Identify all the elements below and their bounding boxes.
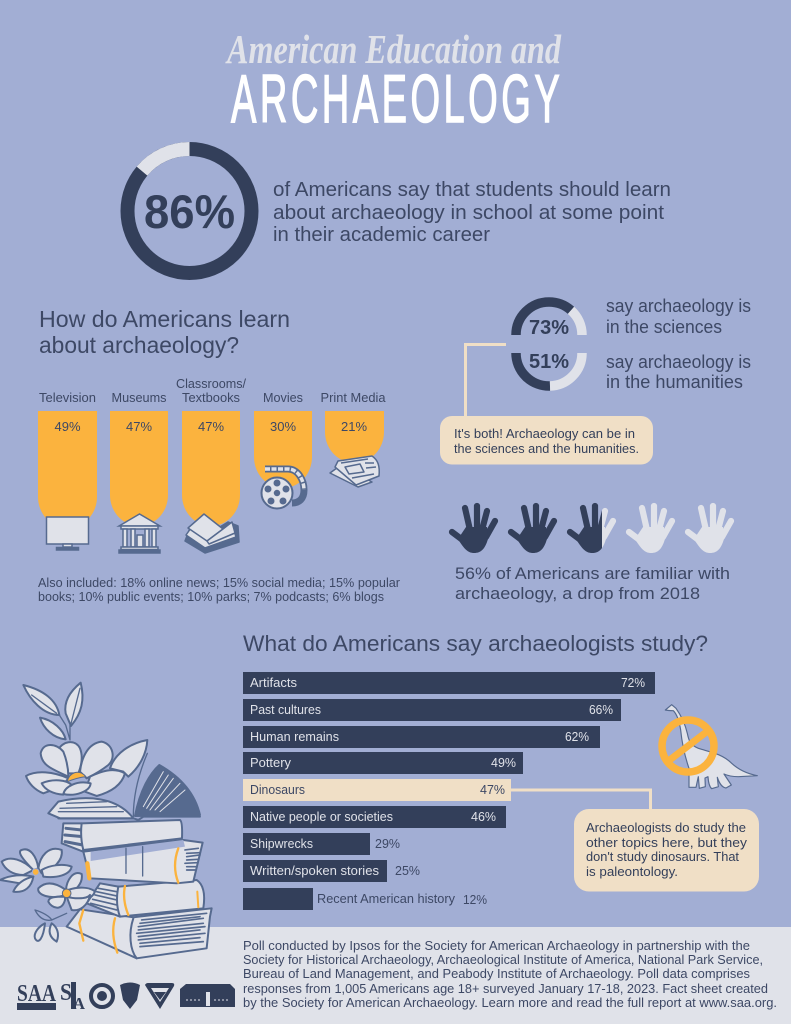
icon: television bbox=[46, 517, 88, 550]
bar: television: 49% bbox=[54, 419, 81, 434]
pictogram: hands 56% bbox=[452, 506, 731, 553]
bar: written stories bbox=[243, 860, 420, 882]
callout: it's both: the sciences and the humanities. bbox=[454, 442, 639, 456]
icon: dark hand 2 bbox=[511, 506, 554, 553]
footer text: Bureau of Land Management, and Peabody Institute of Archaeology. Poll data comprises bbox=[243, 967, 750, 981]
text: familiarity statement: archaeology, a drop from 2018 bbox=[455, 585, 700, 603]
text: sciences and humanities labels: in the humanities bbox=[606, 372, 743, 392]
icon: newspaper bbox=[330, 456, 379, 487]
bar: shipwrecks: 29% bbox=[375, 837, 400, 851]
callout: it's both bbox=[440, 416, 653, 464]
logo: SHA: A bbox=[73, 994, 86, 1013]
callout: paleontology: is paleontology. bbox=[586, 865, 678, 879]
heading: how Americans learn bbox=[39, 306, 290, 358]
leaves and stem bbox=[23, 683, 83, 740]
logo: SAA: SAA bbox=[17, 981, 57, 1007]
donut chart: 86% bbox=[128, 149, 252, 273]
donut chart: 86%: 86% bbox=[144, 185, 235, 238]
text: also included: Also included: 18% online news; 15% social media; 15% popular bbox=[38, 576, 400, 590]
text: 86% statement: in their academic career bbox=[273, 224, 490, 246]
icon: museum bbox=[119, 514, 160, 553]
bar: past cultures: Past cultures bbox=[250, 703, 321, 717]
bar: written stories: 25% bbox=[395, 864, 420, 878]
bar: artifacts: 72% bbox=[621, 676, 645, 690]
bar: pottery bbox=[243, 752, 523, 774]
connector: to both callout bbox=[466, 344, 506, 417]
bar: human remains bbox=[243, 726, 600, 748]
daisies bbox=[0, 849, 95, 942]
bar: native people bbox=[243, 806, 506, 828]
bar: shipwrecks bbox=[243, 833, 400, 855]
callout: paleontology bbox=[574, 809, 759, 892]
icon: light hand 2 bbox=[688, 506, 731, 553]
text: sciences and humanities labels bbox=[606, 296, 751, 392]
text: 86% statement: about archaeology in school at some point bbox=[273, 202, 664, 224]
bar: native people: Native people or societies bbox=[250, 810, 393, 824]
logo: SHA bbox=[60, 980, 86, 1013]
callout: it's both: It's both! Archaeology can be in bbox=[454, 427, 635, 441]
bar: classrooms and textbooks: Textbooks bbox=[182, 391, 240, 405]
icon: dark hand 1 bbox=[452, 506, 495, 553]
logo: peabody institute bbox=[180, 984, 235, 1007]
text: familiarity statement bbox=[455, 565, 730, 603]
half ring: 73% sciences: 73% bbox=[529, 317, 569, 339]
heading: what archaeologists study: What do Americans say archaeologists study? bbox=[243, 631, 708, 656]
chart: learning sources bbox=[38, 377, 386, 553]
text: familiarity statement: 56% of Americans are familiar with bbox=[455, 565, 730, 583]
bar: museums bbox=[110, 391, 168, 553]
title bbox=[225, 26, 561, 137]
bar: pottery: 49% bbox=[491, 756, 516, 770]
logo: SHA: S bbox=[60, 980, 72, 1006]
title: American Education and bbox=[225, 26, 561, 72]
footer text bbox=[243, 939, 777, 1010]
icon: open book bbox=[185, 514, 239, 553]
bar: movies: Movies bbox=[263, 391, 303, 405]
bar: television: Television bbox=[39, 391, 96, 405]
bar: human remains: 62% bbox=[565, 730, 589, 744]
second book bbox=[83, 840, 203, 883]
bar: print media: Print Media bbox=[320, 391, 386, 405]
bar: recent history: 12% bbox=[463, 893, 487, 907]
icon: light hand 1 bbox=[629, 506, 672, 553]
third book bbox=[87, 880, 204, 917]
bar: artifacts bbox=[243, 672, 655, 694]
open book bbox=[48, 753, 200, 820]
bar: museums: Museums bbox=[112, 391, 166, 405]
icon: crossed-out dinosaur bbox=[662, 705, 757, 789]
bar: recent history: Recent American history bbox=[317, 892, 456, 906]
icon: split hand bbox=[570, 506, 613, 553]
bar: dinosaurs bbox=[243, 779, 511, 801]
bar: classrooms and textbooks: Classrooms/ bbox=[176, 377, 247, 391]
bar: pottery: Pottery bbox=[250, 756, 292, 770]
bar: past cultures bbox=[243, 699, 621, 721]
text: also included bbox=[38, 576, 400, 604]
callout: paleontology: other topics here, but they bbox=[586, 836, 748, 850]
bar: television bbox=[38, 391, 97, 550]
logo: national park service bbox=[120, 982, 140, 1009]
large flower bbox=[26, 740, 147, 796]
footer text: Poll conducted by Ipsos for the Society for American Archaeology in partnership with the bbox=[243, 939, 750, 953]
bar: dinosaurs: 47% bbox=[480, 783, 505, 797]
logo: institute seal bbox=[91, 985, 113, 1007]
bar: shipwrecks: Shipwrecks bbox=[250, 837, 313, 851]
illustration: books and flowers bbox=[0, 683, 212, 958]
footer text: responses from 1,005 Americans age 18+ surveyed January 17-18, 2023. Fact sheet created bbox=[243, 982, 768, 996]
bar: museums: 47% bbox=[126, 419, 152, 434]
callout: paleontology: Archaeologists do study the bbox=[586, 821, 746, 835]
bar: classrooms and textbooks bbox=[176, 377, 247, 553]
bar: classrooms and textbooks: 47% bbox=[198, 419, 224, 434]
bar: written stories: Written/spoken stories bbox=[250, 864, 379, 878]
text: sciences and humanities labels: say archaeology is bbox=[606, 352, 751, 372]
bar: movies bbox=[254, 391, 312, 508]
bottom book bbox=[67, 908, 212, 958]
bar: print media: 21% bbox=[341, 419, 367, 434]
bar chart: what archaeologists study bbox=[243, 672, 655, 910]
text: 86% statement bbox=[273, 179, 671, 246]
logo: bureau of land management bbox=[145, 983, 174, 1009]
callout: paleontology: don't study dinosaurs. That bbox=[586, 850, 740, 864]
footer text: by the Society for American Archaeology. Learn more and read the full report at www.saa.org. bbox=[243, 996, 777, 1010]
text: 86% statement: of Americans say that students should learn bbox=[273, 179, 671, 201]
title: ARCHAEOLOGY bbox=[231, 60, 560, 137]
bar: human remains: Human remains bbox=[250, 730, 339, 744]
heading: how Americans learn: How do Americans learn bbox=[39, 306, 290, 332]
bar: recent history bbox=[243, 888, 487, 910]
footer band bbox=[0, 927, 791, 1024]
bar: dinosaurs: Dinosaurs bbox=[250, 783, 305, 797]
top closed book bbox=[62, 820, 182, 852]
bar: movies: 30% bbox=[270, 419, 296, 434]
half ring: 73% sciences bbox=[516, 302, 582, 339]
logos bbox=[17, 980, 235, 1013]
bar: print media bbox=[320, 391, 386, 487]
text: sciences and humanities labels: say archaeology is bbox=[606, 296, 751, 316]
connector: to dinosaurs callout bbox=[511, 790, 650, 811]
bar: artifacts: Artifacts bbox=[250, 676, 297, 690]
footer text: Society for Historical Archaeology, Archaeological Institute of America, National Park Service, bbox=[243, 953, 763, 967]
heading: how Americans learn: about archaeology? bbox=[39, 332, 239, 358]
bar: past cultures: 66% bbox=[589, 703, 613, 717]
half ring: 51% humanities: 51% bbox=[529, 351, 569, 373]
bar: native people: 46% bbox=[471, 810, 496, 824]
text: sciences and humanities labels: in the sciences bbox=[606, 317, 722, 337]
half ring: 51% humanities bbox=[516, 351, 582, 386]
icon: film reel bbox=[262, 469, 304, 508]
text: also included: books; 10% public events; 10% parks; 7% podcasts; 6% blogs bbox=[38, 590, 384, 604]
